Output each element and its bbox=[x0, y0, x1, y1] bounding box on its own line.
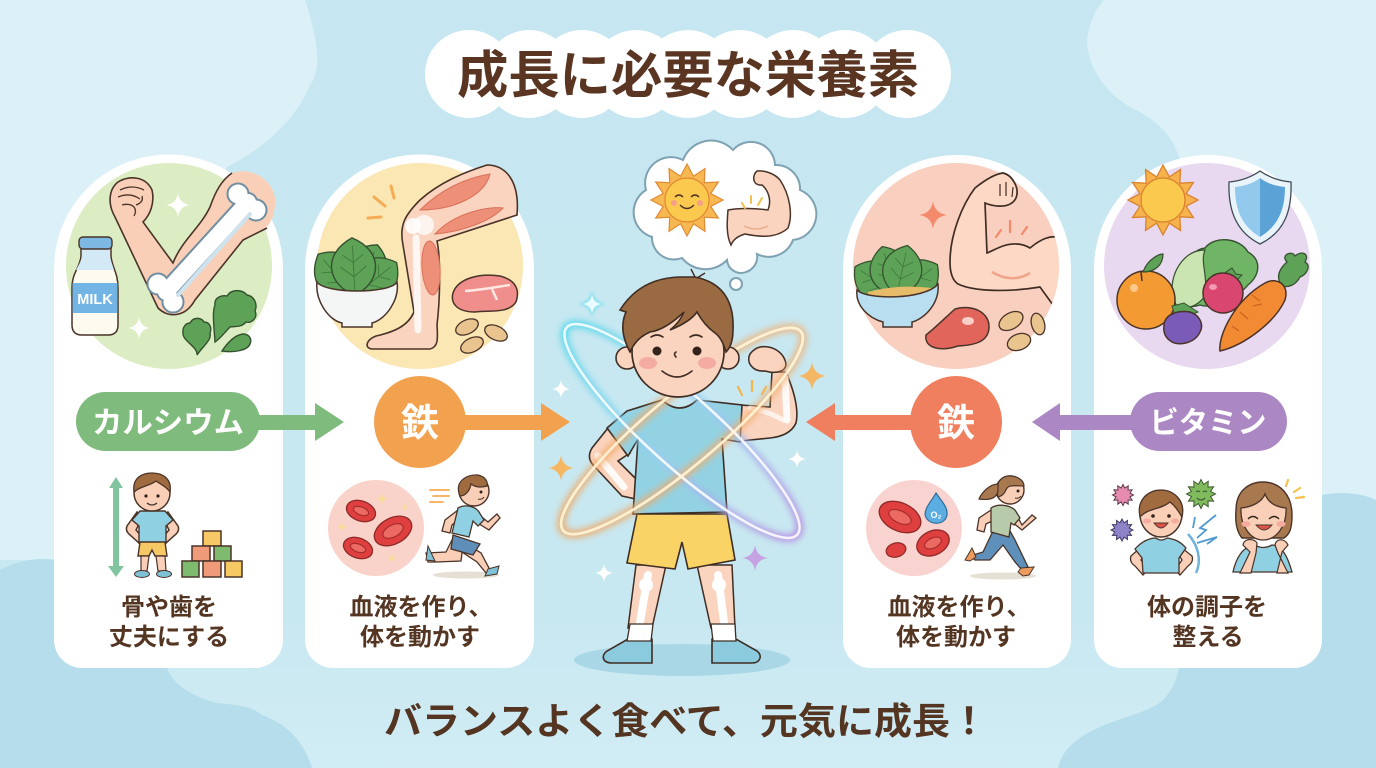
title: 成長に必要な栄養素 bbox=[457, 47, 919, 104]
arms bbox=[589, 347, 797, 500]
panel: iron left bbox=[302, 154, 534, 668]
arrow: iron left bbox=[464, 403, 570, 441]
title bbox=[425, 30, 951, 118]
icon: leafy greens bbox=[183, 291, 256, 355]
shorts bbox=[627, 514, 735, 569]
shirt bbox=[607, 400, 742, 514]
icon: growing child with blocks bbox=[108, 473, 242, 578]
label: iron bbox=[910, 376, 1002, 468]
icon: red blood cells bbox=[328, 480, 424, 576]
icon: spinach bowl bbox=[302, 236, 409, 327]
icon: arm with bone bbox=[110, 171, 275, 315]
rings bbox=[541, 301, 823, 561]
arrow: vitamin bbox=[1032, 403, 1132, 441]
text: iron benefit bbox=[349, 594, 493, 651]
panel: iron right bbox=[843, 155, 1071, 668]
label: iron: 鉄 bbox=[937, 403, 975, 445]
label: vitamin bbox=[1130, 392, 1287, 451]
icon: steak bbox=[926, 308, 989, 349]
sparkles bbox=[548, 290, 826, 582]
icon: radish bbox=[1203, 268, 1243, 313]
text: iron benefit: 血液を作り、 bbox=[349, 594, 493, 621]
icon: healthy boy bbox=[1130, 490, 1217, 575]
text: vitamin benefit: 整える bbox=[1172, 624, 1244, 651]
icon: blood cells and oxygen: O₂ bbox=[930, 510, 942, 520]
icon: lettuce bbox=[1172, 240, 1258, 308]
text: iron benefit: 体を動かす bbox=[896, 624, 1016, 651]
icon: berry bbox=[1164, 303, 1202, 344]
text: iron benefit: 血液を作り、 bbox=[887, 594, 1031, 621]
icon: milk bottle bbox=[72, 237, 118, 335]
muscle spark bbox=[738, 381, 766, 395]
icon: muscle arm bbox=[727, 171, 790, 245]
icon: shield bbox=[1229, 171, 1291, 244]
icon: happy girl bbox=[1233, 480, 1304, 573]
icon: running girl bbox=[965, 476, 1036, 580]
text: calcium benefit bbox=[109, 594, 229, 651]
icon: leg with muscles bbox=[367, 165, 517, 349]
legs bbox=[627, 565, 736, 641]
character: boy with glowing rings bbox=[541, 269, 826, 676]
icon: sun bbox=[1128, 165, 1198, 235]
label: calcium bbox=[76, 392, 260, 451]
text: vitamin benefit bbox=[1147, 594, 1267, 651]
icon: viruses bbox=[1111, 480, 1216, 541]
icon: spark lines bbox=[368, 186, 394, 218]
icon: sparkles bbox=[128, 193, 190, 339]
label: vitamin: ビタミン bbox=[1150, 407, 1266, 440]
icon: flexed arm bbox=[949, 172, 1059, 304]
icon: blood cells and oxygen bbox=[866, 480, 962, 576]
icon: beans bbox=[996, 308, 1047, 354]
arrow: calcium bbox=[258, 403, 344, 441]
icon: spinach bowl bbox=[844, 241, 949, 327]
label: iron: 鉄 bbox=[401, 403, 439, 445]
panel: vitamin bbox=[1094, 155, 1322, 668]
text: iron benefit bbox=[887, 594, 1031, 651]
text: iron benefit: 体を動かす bbox=[360, 624, 480, 651]
text: calcium benefit: 丈夫にする bbox=[109, 624, 229, 651]
head bbox=[616, 269, 739, 397]
icon: carrot bbox=[1220, 253, 1308, 351]
label: iron bbox=[374, 376, 466, 468]
icon: orange sparkle bbox=[919, 201, 947, 229]
text: calcium benefit: 骨や歯を bbox=[121, 594, 217, 621]
icon: running boy bbox=[426, 475, 500, 578]
icon: meat bbox=[452, 275, 517, 312]
label: calcium: カルシウム bbox=[92, 407, 244, 440]
icon: smiling sun bbox=[651, 164, 723, 236]
panel: calcium bbox=[54, 154, 283, 668]
shoes bbox=[603, 639, 760, 663]
slogan: バランスよく食べて、元気に成長！ bbox=[384, 701, 988, 742]
icon: orange bbox=[1117, 254, 1175, 329]
arrow: iron right bbox=[806, 403, 912, 441]
text: vitamin benefit: 体の調子を bbox=[1147, 594, 1267, 621]
icon: beans bbox=[453, 316, 510, 356]
shadow bbox=[574, 644, 790, 676]
icon: milk bottle: MILK bbox=[77, 292, 113, 308]
thought bubble bbox=[634, 141, 816, 290]
